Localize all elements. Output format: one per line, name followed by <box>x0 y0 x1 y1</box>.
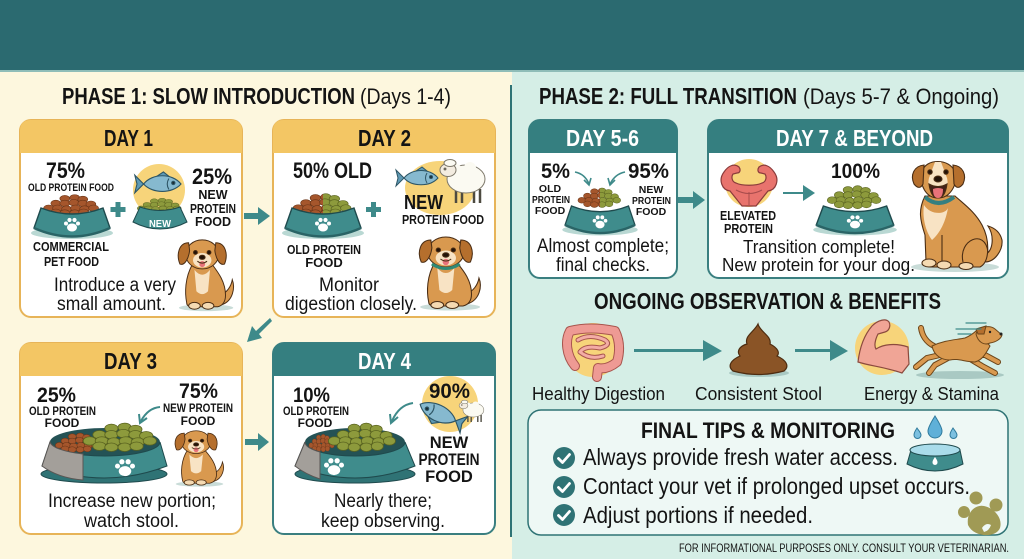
heading: phase 2: PHASE 2: FULL TRANSITION <box>539 83 797 109</box>
label: new protein food: PROTEIN <box>418 451 480 469</box>
label: elevated protein: ELEVATED <box>720 208 776 223</box>
note: New protein for your dog. <box>722 254 915 275</box>
arrow: protein to food <box>783 185 815 201</box>
note: small amount. <box>57 294 166 315</box>
label: 25% new protein: FOOD <box>195 215 231 229</box>
note: Introduce a very <box>54 275 176 296</box>
card: day 1: DAY 1 <box>104 125 153 151</box>
note: watch stool. <box>83 511 179 532</box>
panel: phase 1 <box>20 83 495 534</box>
label: 5% old protein: OLD <box>539 183 561 195</box>
label: 25% old protein <box>29 384 96 430</box>
note: Almost complete; <box>537 236 669 257</box>
note <box>54 275 176 315</box>
icon: adult dog <box>911 162 1002 272</box>
label: 25% new protein <box>190 164 236 229</box>
arrow: day 5-6 to day 7 <box>678 191 705 209</box>
label: 95% new protein <box>628 160 671 218</box>
label: 75% new protein <box>163 380 233 428</box>
label: 50% old: 50% OLD <box>293 158 372 183</box>
label: new protein food <box>402 192 484 227</box>
card: day 1 <box>20 120 242 317</box>
background: phase 1 <box>0 0 512 559</box>
icon: running dog <box>916 323 1004 379</box>
note: final checks. <box>556 255 650 276</box>
label: 10% old protein: FOOD <box>298 416 333 430</box>
icon: water bowl <box>907 416 963 471</box>
icon: puppy <box>178 240 233 311</box>
label: 10% old protein: 10% <box>293 384 330 407</box>
note: Transition complete! <box>743 236 895 257</box>
arrow: curved to bowl <box>390 403 413 423</box>
label: 75% new protein: 75% <box>179 380 218 403</box>
icon: new food with fish <box>133 164 187 230</box>
card: day 2: DAY 2 <box>358 125 411 151</box>
card: day 5-6 <box>529 120 677 278</box>
icon: intestines <box>566 323 620 377</box>
label: 5% old protein <box>532 160 570 217</box>
tip: vet: Contact your vet if prolonged upset occurs. <box>583 473 970 499</box>
note <box>722 236 915 275</box>
heading: phase 2 <box>539 83 999 109</box>
label: 25% new protein: 25% <box>192 164 232 189</box>
label: old protein food: OLD PROTEIN <box>287 242 361 257</box>
card: day 2 <box>273 120 495 317</box>
label: 95% new protein: 95% <box>628 160 669 183</box>
tip: water: Always provide fresh water access. <box>583 444 898 470</box>
note: Nearly there; <box>334 491 432 512</box>
label: 90%: 90% <box>429 380 470 403</box>
card: day 3: DAY 3 <box>104 348 157 374</box>
label: 95% new protein: PROTEIN <box>632 195 671 207</box>
label: 100%: 100% <box>831 160 880 183</box>
icon: old food bowl <box>31 195 113 239</box>
arrows: curved to bowl <box>575 172 625 185</box>
card: day 5-6: DAY 5-6 <box>566 125 639 151</box>
note <box>321 491 445 532</box>
label: 10% old protein: OLD PROTEIN <box>283 404 349 418</box>
label: elevated protein: PROTEIN <box>724 221 773 236</box>
arrow: curved to bowl <box>139 407 160 423</box>
card: day 7 and beyond <box>708 120 1008 278</box>
section: ongoing observation <box>532 288 1004 404</box>
icon: plus <box>366 202 381 217</box>
icon: full new food bowl <box>813 186 897 235</box>
label: 75% old protein: OLD PROTEIN FOOD <box>28 182 114 194</box>
heading: phase 1: (Days 1-4) <box>360 84 451 109</box>
label: 95% new protein: FOOD <box>636 206 667 218</box>
icon: half and half bowl <box>282 194 364 239</box>
panel: final tips <box>528 410 1008 535</box>
icon: plus <box>110 202 126 217</box>
note: Monitor <box>319 275 380 296</box>
heading: phase 2: (Days 5-7 & Ongoing) <box>803 84 999 109</box>
arrow: stool to energy <box>795 340 848 361</box>
label: 75% old protein <box>28 158 114 194</box>
label: 5% old protein: PROTEIN <box>532 194 570 206</box>
label: 25% old protein: 25% <box>37 384 76 407</box>
label: 5% old protein: 5% <box>541 160 570 183</box>
icon: stool <box>729 324 789 377</box>
label: new protein food: FOOD <box>425 468 473 486</box>
icon: flexed arm <box>855 320 909 375</box>
label: old protein food: FOOD <box>305 255 343 270</box>
icon: fish and lamb <box>396 160 485 215</box>
icon: paw logo <box>958 492 1002 535</box>
label: 25% new protein: PROTEIN <box>190 202 236 216</box>
label: 75% new protein: FOOD <box>181 414 216 428</box>
label: 25% new protein: NEW <box>198 188 228 202</box>
heading: final tips: FINAL TIPS & MONITORING <box>641 418 895 443</box>
card: day 4 <box>273 343 495 534</box>
label: new protein food: PROTEIN FOOD <box>402 213 484 227</box>
icon: 25/75 wide bowl <box>41 423 167 483</box>
card: day 3 <box>20 343 242 534</box>
label: elevated protein <box>720 208 776 236</box>
icon: puppy with collar <box>419 237 480 310</box>
label: commercial pet food: COMMERCIAL <box>33 239 109 254</box>
icon: 10/90 wide bowl <box>295 423 415 483</box>
tip: portions: Adjust portions if needed. <box>583 502 813 528</box>
label: consistent stool: Consistent Stool <box>695 384 822 404</box>
label: 5% old protein: FOOD <box>535 205 566 217</box>
icon: elevated protein muscle <box>721 159 777 207</box>
icon: fish and lamb <box>415 376 484 436</box>
label: new protein food: NEW <box>404 192 443 214</box>
arrow: day 1 to day 2 <box>244 207 270 225</box>
note: keep observing. <box>321 511 445 532</box>
arrow: day 2 to day 3 <box>247 318 272 342</box>
note <box>537 236 669 276</box>
label: new protein food: NEW <box>430 434 469 452</box>
label: 10% old protein <box>283 384 349 430</box>
icon: puppy <box>175 431 224 487</box>
note: digestion closely. <box>285 294 417 315</box>
label: new protein food <box>418 434 480 486</box>
label: 95% new protein: NEW <box>639 184 663 196</box>
note <box>48 491 216 532</box>
label: old protein food <box>287 242 361 270</box>
note: Increase new portion; <box>48 491 216 512</box>
label: commercial pet food <box>33 239 109 269</box>
card: day 7 and beyond: DAY 7 & BEYOND <box>776 125 933 151</box>
label: healthy digestion: Healthy Digestion <box>532 384 665 404</box>
note <box>285 275 417 315</box>
label: 25% old protein: OLD PROTEIN <box>29 404 96 418</box>
label: commercial pet food: PET FOOD <box>44 254 99 269</box>
arrow: digestion to stool <box>634 340 722 361</box>
icon: 5/95 bowl <box>562 188 638 235</box>
arrow: day 3 to day 4 <box>245 433 269 451</box>
heading: ongoing observation: ONGOING OBSERVATION & BENEFITS <box>594 288 941 314</box>
label: 75% new protein: NEW PROTEIN <box>163 401 233 415</box>
label: 25% old protein: FOOD <box>45 416 80 430</box>
label: 75% old protein: 75% <box>46 158 85 183</box>
heading: phase 1: PHASE 1: SLOW INTRODUCTION <box>62 83 355 109</box>
label: energy and stamina: Energy & Stamina <box>864 384 1000 404</box>
panel: phase 2 <box>528 83 1009 555</box>
icon: new food with fish: NEW <box>149 218 171 230</box>
background: phase 2 <box>512 0 1024 559</box>
card: day 4: DAY 4 <box>358 348 411 374</box>
top banner <box>0 0 1024 70</box>
